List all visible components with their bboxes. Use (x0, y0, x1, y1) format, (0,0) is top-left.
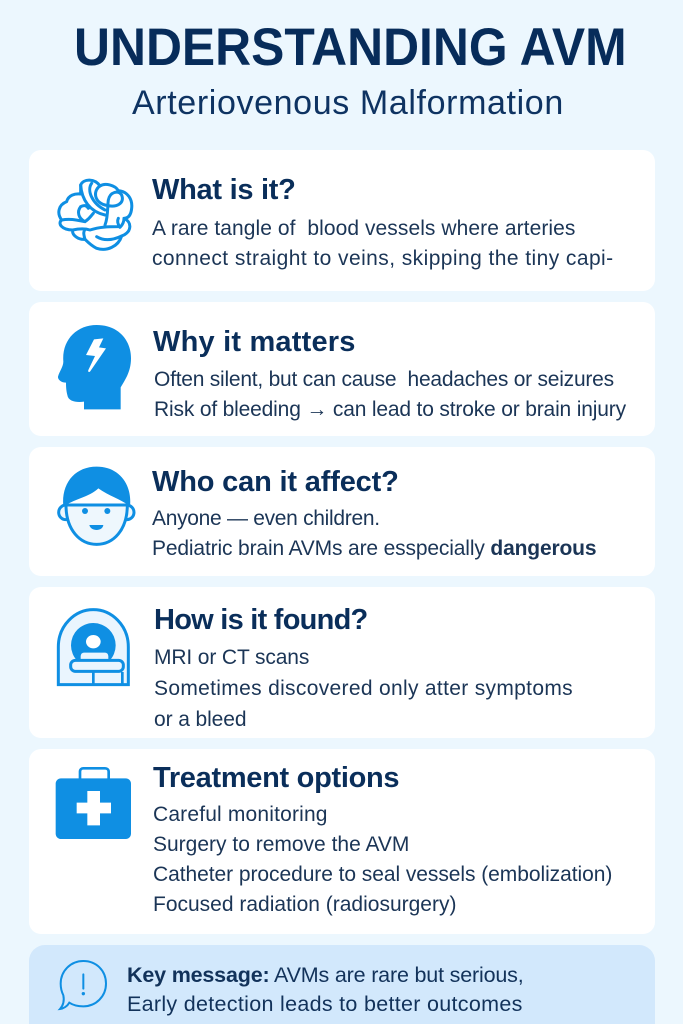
body text: or a bleed (154, 708, 246, 731)
icon: speech bubble with exclamation (58, 960, 107, 1010)
body text: Risk of bleeding → can lead to stroke or brain injury (154, 398, 626, 421)
body text: A rare tangle of blood vessels where arteries (152, 217, 575, 240)
body text (152, 507, 596, 560)
key message text (127, 962, 524, 1016)
key message text: Early detection leads to better outcomes (127, 992, 523, 1016)
body text: Often silent, but can cause headaches or seizures (154, 368, 614, 391)
body text: Focused radiation (radiosurgery) (153, 893, 456, 916)
heading: Why it matters (153, 326, 356, 358)
icon: child face (57, 466, 136, 546)
panel: treatment options (29, 749, 655, 934)
icon: head with lightning bolt (58, 325, 131, 410)
key message text: Key message: AVMs are rare but serious, (127, 962, 524, 986)
body text: Careful monitoring (153, 803, 328, 826)
body text: Pediatric brain AVMs are esspecially dangerous (152, 537, 596, 560)
body text: Catheter procedure to seal vessels (embolization) (153, 863, 612, 886)
body text: Sometimes discovered only atter symptoms (154, 677, 573, 700)
heading: What is it? (152, 174, 296, 206)
heading: Treatment options (153, 762, 399, 794)
icon: brain tangle (57, 178, 134, 251)
panel: key message (29, 945, 655, 1024)
panel: why it matters (29, 302, 655, 436)
body text: Surgery to remove the AVM (153, 833, 409, 856)
panel: how is it found (29, 587, 655, 738)
subtitle: Arteriovenous Malformation (132, 84, 564, 122)
body text (153, 803, 612, 916)
body text (152, 217, 614, 270)
body text (154, 368, 626, 421)
body text: connect straight to veins, skipping the tiny capi- (152, 247, 614, 270)
body text: Anyone — even children. (152, 507, 380, 530)
heading: How is it found? (154, 604, 368, 636)
heading: Who can it affect? (152, 466, 399, 498)
body text: MRI or CT scans (154, 646, 309, 669)
title: UNDERSTANDING AVM (74, 18, 626, 77)
icon: MRI scanner (56, 608, 130, 686)
icon: medical kit (56, 767, 131, 839)
panel: who can it affect (29, 447, 655, 576)
body text (154, 646, 573, 731)
panel: what is it (29, 150, 655, 291)
